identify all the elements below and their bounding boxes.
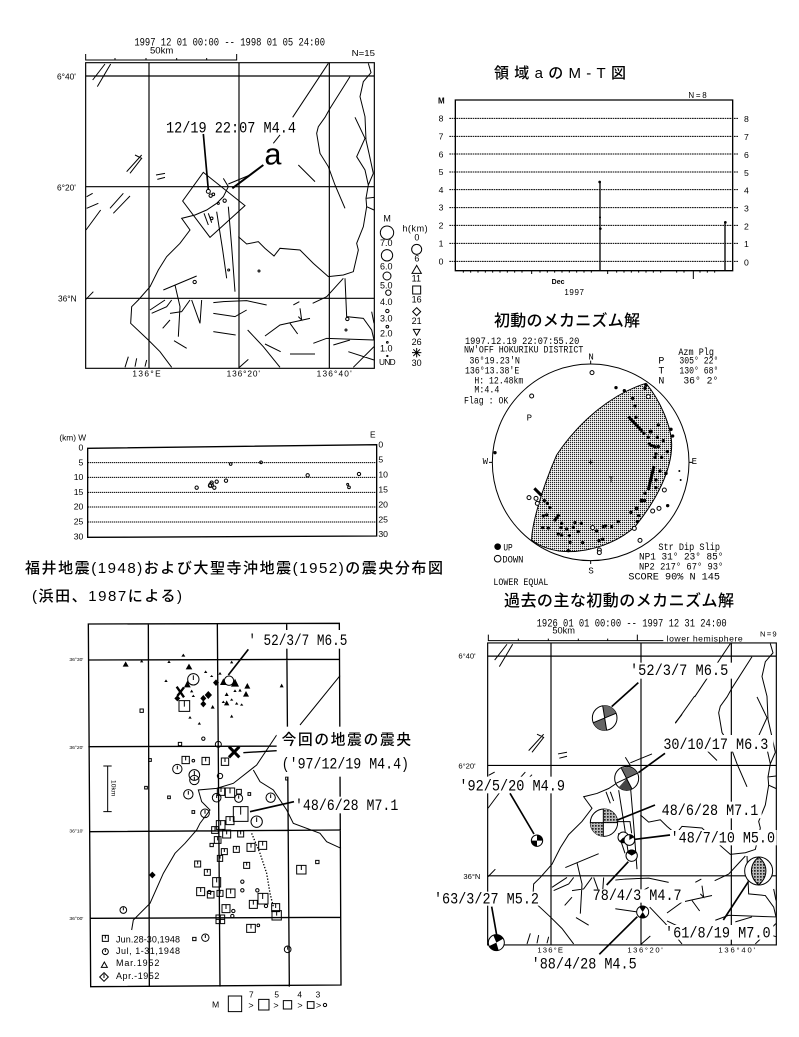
magnitude axis labels: 6 [744, 150, 749, 160]
depth scale: 16 [412, 295, 422, 305]
map frame and graticule [488, 643, 776, 945]
magnitude axis labels [438, 96, 749, 267]
magnitude scale: 3.0 [380, 314, 392, 324]
axis labels: 6°20' [57, 183, 76, 193]
axis labels: 6°40' [458, 651, 476, 660]
azimuth plunge table: N [658, 375, 664, 386]
azimuth plunge table: 130° 68° [679, 365, 718, 376]
axis labels: 136°40' [718, 945, 756, 954]
depth scale: 30 [412, 358, 422, 368]
mechanism 52/3/7 M6.5 [592, 662, 733, 730]
depth scale [402, 224, 428, 368]
magnitude axis labels: 8 [439, 113, 444, 123]
magnitude scale [379, 214, 396, 367]
axis labels: 136°E [132, 369, 161, 379]
axis labels [57, 71, 352, 379]
mechanism 92/5/20 M4.9 [457, 777, 568, 846]
map legend: Jul, 1-31,1948 [116, 946, 180, 956]
heading: M-T chart: 領域aのM-T図 [494, 65, 626, 82]
mechanism 52/3/7 M6.5: '52/3/7 M6.5 [630, 662, 728, 680]
mechanism 92/5/20 M4.9: '92/5/20 M4.9 [459, 778, 565, 796]
polarity legend: UP [503, 543, 513, 554]
azimuth plunge table: P [658, 355, 664, 366]
event header text: 1997.12.19 22:07:55.20 [465, 336, 579, 347]
section frame and depth lines [88, 445, 377, 537]
magnitude axis labels: 1 [439, 238, 444, 248]
magnitude axis labels: 4 [439, 185, 444, 195]
magnitude size legend: > [297, 1001, 303, 1011]
count and time labels [552, 91, 707, 297]
magnitude size legend: M [212, 999, 219, 1009]
event count: N=15 [352, 48, 375, 58]
label 52/3/7 M6.5: ' 52/3/7 M6.5 [248, 632, 347, 650]
event header text: H: 12.48km [474, 375, 523, 386]
depth scale: h(km) [402, 224, 428, 234]
magnitude scale: M [383, 214, 391, 224]
map legend: Mar.1952 [116, 958, 159, 968]
section axis labels: 25 [74, 517, 84, 527]
polarity legend: LOWER EQUAL [493, 577, 548, 588]
magnitude scale: UND [379, 357, 396, 367]
magnitude axis labels: 8 [744, 114, 749, 124]
nodal plane table: NP2 217° 67° 93° [639, 561, 723, 572]
axis labels [458, 651, 756, 954]
label 52/3/7 M6.5 [228, 630, 354, 675]
event label 12/19 22:07 M4.4: 12/19 22:07 M4.4 [166, 120, 296, 138]
depth scale: 26 [412, 337, 422, 347]
compass and axis marks [483, 352, 697, 576]
coastline and faults [488, 644, 776, 944]
magnitude axis labels: 7 [744, 132, 749, 142]
magnitude scale: 2.0 [380, 329, 392, 339]
event header text: 136°13.38'E [465, 365, 519, 376]
mechanism 78/4/3 M4.7 [590, 850, 685, 905]
mechanism 78/4/3 M4.7: 78/4/3 M4.7 [593, 887, 682, 905]
azimuth plunge table: T [658, 365, 664, 376]
mechanism 61/8/19 M7.0: '61/8/19 M7.0 [665, 924, 771, 942]
magnitude axis labels: 2 [744, 221, 749, 231]
current epicenter X and arrow [229, 747, 277, 757]
section axis labels: E [370, 429, 376, 439]
latitude labels [69, 657, 83, 922]
compass and axis marks: E [692, 457, 697, 467]
map legend: Jun.28-30,1948 [116, 934, 180, 944]
plot frame and gridlines [449, 100, 738, 279]
compass and axis marks: P [527, 414, 532, 424]
down polarity circles [527, 371, 666, 555]
region a rectangle [183, 172, 245, 237]
label current quake epicenter [277, 727, 417, 777]
latitude labels: 36°30' [69, 657, 83, 663]
count and time labels: Dec [552, 279, 565, 286]
axis labels: 136°40' [317, 369, 352, 379]
magnitude scale: 1.0 [380, 344, 392, 354]
scale bar [488, 635, 663, 641]
magnitude axis labels: 7 [439, 131, 444, 141]
map header date range: 1997 12 01 00:00 -- 1998 01 05 24:00 [134, 38, 325, 50]
mechanism 88/4/28 M4.5: '88/4/28 M4.5 [532, 955, 637, 973]
depth scale: 6 [414, 254, 419, 264]
axis labels: 36°N [463, 872, 480, 881]
depth scale: 21 [412, 316, 422, 326]
magnitude scale: 5.0 [380, 281, 392, 291]
depth cross section W-E [59, 429, 388, 541]
axis labels: 136°20' [227, 369, 260, 379]
section axis labels: 0 [378, 440, 383, 450]
latitude labels: 36°00' [69, 916, 83, 922]
section axis labels: 10 [378, 470, 388, 480]
magnitude axis labels: 3 [744, 203, 749, 213]
label 48/6/28 M7.1 [250, 797, 405, 815]
map header: 1926 01 01 00:00 -- 1997 12 31 24:00 [537, 619, 727, 631]
count and time labels: N=8 [688, 91, 707, 100]
magnitude scale: 4.0 [380, 297, 392, 307]
magnitude size legend: > [316, 1001, 321, 1011]
azimuth plunge table: 36° 2° [683, 375, 718, 386]
polarity legend: DOWN [502, 555, 523, 566]
section axis labels: 20 [378, 499, 388, 509]
count and time labels: 1997 [564, 288, 585, 297]
label 48/6/28 M7.1: '48/6/28 M7.1 [295, 797, 398, 815]
large cross of 1952 event [177, 687, 184, 697]
polarity legend [493, 543, 548, 588]
magnitude size legend: 5 [274, 989, 279, 999]
fault dotted line [252, 833, 273, 907]
azimuth plunge table: Azm Plg [678, 347, 714, 358]
Jun 1948 squares [179, 701, 306, 932]
section axis labels: 10 [74, 472, 84, 482]
scale bar 50km [86, 45, 237, 60]
mechanism 48/7/10 M5.0 [617, 822, 777, 853]
magnitude axis labels: 3 [439, 203, 444, 213]
axis labels: 136°E [537, 945, 563, 954]
mechanism 63/3/27 M5.2 [432, 890, 542, 951]
coastline [132, 676, 341, 930]
map header: N=9 [760, 630, 777, 639]
event header text: M:4.4 [474, 385, 499, 396]
section axis labels: 15 [74, 487, 84, 497]
label current quake epicenter: 今回の地震の震央 [282, 731, 411, 748]
heading: Fukui map title: 福井地震(1948)および大聖寺沖地震(1952)の震央分布図 [25, 560, 443, 577]
magnitude axis labels: 1 [744, 239, 749, 249]
magnitude scale: 7.0 [380, 238, 392, 248]
magnitude size legend: > [273, 1001, 279, 1011]
map legend [100, 934, 180, 981]
mechanism 48/7/10 M5.0: '48/7/10 M5.0 [671, 829, 775, 847]
axis labels: 6°40' [57, 71, 76, 81]
epicenters [193, 189, 349, 331]
compass and axis marks: T [608, 475, 614, 485]
mechanism 88/4/28 M4.5 [529, 906, 649, 973]
section axis labels: 20 [74, 502, 84, 512]
10km scale bar: 10km [110, 780, 117, 797]
1952 April diamonds [149, 679, 219, 878]
map: Fukui 1948 and Daishoji-oki 1952 epicenters [69, 623, 417, 1012]
axis labels: 36°N [58, 294, 77, 304]
magnitude axis labels: 5 [439, 167, 444, 177]
mechanism 61/8/19 M7.0 [662, 857, 773, 942]
map legend: Apr.-1952 [116, 971, 159, 981]
section axis labels: 5 [79, 457, 84, 467]
lower hemisphere circle [492, 364, 689, 561]
latitude labels: 36°10' [69, 828, 83, 834]
scale bar 50km: 50km [150, 45, 173, 55]
magnitude size legend: 3 [316, 989, 321, 999]
nodal plane table: NP1 31° 23° 85° [639, 551, 723, 562]
mechanism 48/6/28 M7.1 [590, 802, 762, 836]
up polarity dots [493, 383, 682, 552]
stippled T quadrant [532, 383, 672, 552]
mechanism 30/10/17 M6.3: 30/10/17 M6.3 [663, 736, 768, 754]
section axis labels: 5 [378, 455, 383, 465]
nodal plane table [628, 542, 723, 582]
mechanism 30/10/17 M6.3 [615, 735, 773, 790]
event header text [464, 336, 583, 406]
section axis labels: (km) W [59, 433, 86, 443]
map: past mechanism solutions [432, 619, 777, 973]
fault continuation [675, 696, 695, 723]
mechanism 48/6/28 M7.1: 48/6/28 M7.1 [662, 802, 758, 820]
compass and axis marks: S [588, 566, 594, 576]
section axis labels: 15 [378, 485, 388, 495]
magnitude scale: 6.0 [380, 261, 392, 271]
nodal plane table: Str Dip Slip [658, 542, 720, 553]
map: epicenter map a 1997-12 to 1998-01 [57, 38, 375, 379]
region label a [232, 137, 282, 188]
mechanism 63/3/27 M5.2: '63/3/27 M5.2 [434, 890, 539, 908]
source note: (浜田、1987による) [32, 588, 182, 605]
label current quake epicenter: ('97/12/19 M4.4) [282, 755, 409, 773]
map frame and graticule [86, 63, 374, 368]
magnitude axis labels: 0 [744, 257, 749, 267]
coastline and fault lines [86, 63, 374, 367]
event header text: NW'OFF HOKURIKU DISTRICT [464, 345, 583, 356]
magnitude axis labels: 0 [439, 256, 444, 266]
magnitude size legend [212, 989, 327, 1012]
map header: 50km [552, 625, 575, 635]
focal mechanism stereonet [464, 336, 723, 588]
section axis labels: 30 [378, 529, 388, 539]
section axis labels: 30 [74, 531, 84, 541]
small events [140, 709, 319, 941]
nodal plane table: SCORE 90% N 145 [628, 571, 720, 582]
depth scale: 11 [412, 274, 421, 284]
region label a: a [264, 137, 282, 171]
event header text: Flag : OK [464, 395, 508, 406]
chart: magnitude time [438, 91, 749, 297]
compass and axis marks: W [483, 457, 489, 467]
Jul 1948 circles [120, 674, 291, 953]
compass and axis marks: N [588, 352, 594, 362]
event stems [598, 181, 727, 271]
magnitude size legend: 4 [297, 989, 302, 999]
magnitude size legend: 7 [249, 989, 254, 999]
section axis labels [59, 429, 388, 541]
heading: mechanism solution: 初動のメカニズム解 [494, 311, 640, 330]
magnitude size legend: > [248, 1001, 254, 1011]
section axis labels: 25 [378, 515, 388, 525]
legend: magnitude and depth [379, 214, 428, 368]
depth scale: 0 [414, 233, 419, 243]
section axis labels: 0 [79, 443, 84, 453]
10km scale bar [103, 766, 117, 812]
magnitude axis labels: 5 [744, 168, 749, 178]
leader to epicenter [203, 134, 208, 190]
heading: past mechanism solutions: 過去の主な初動のメカニズム解 [504, 591, 734, 610]
magnitude axis labels: 2 [439, 221, 444, 231]
latitude labels: 36°20' [69, 745, 83, 751]
1952 March triangles [123, 654, 284, 725]
magnitude axis labels: 6 [439, 149, 444, 159]
map header: lower hemisphere [667, 634, 743, 644]
azimuth plunge table: 305° 22° [679, 355, 718, 366]
azimuth plunge table [658, 347, 718, 386]
magnitude axis labels: 4 [744, 186, 749, 196]
section hypocenters [195, 461, 361, 489]
magnitude axis labels: M [438, 96, 445, 105]
axis labels: 6°20' [458, 761, 476, 770]
map frame and grid [88, 623, 341, 987]
map header [537, 619, 777, 644]
axis labels: 136°20' [627, 945, 663, 954]
event header text: 36°19.23'N [469, 355, 520, 366]
